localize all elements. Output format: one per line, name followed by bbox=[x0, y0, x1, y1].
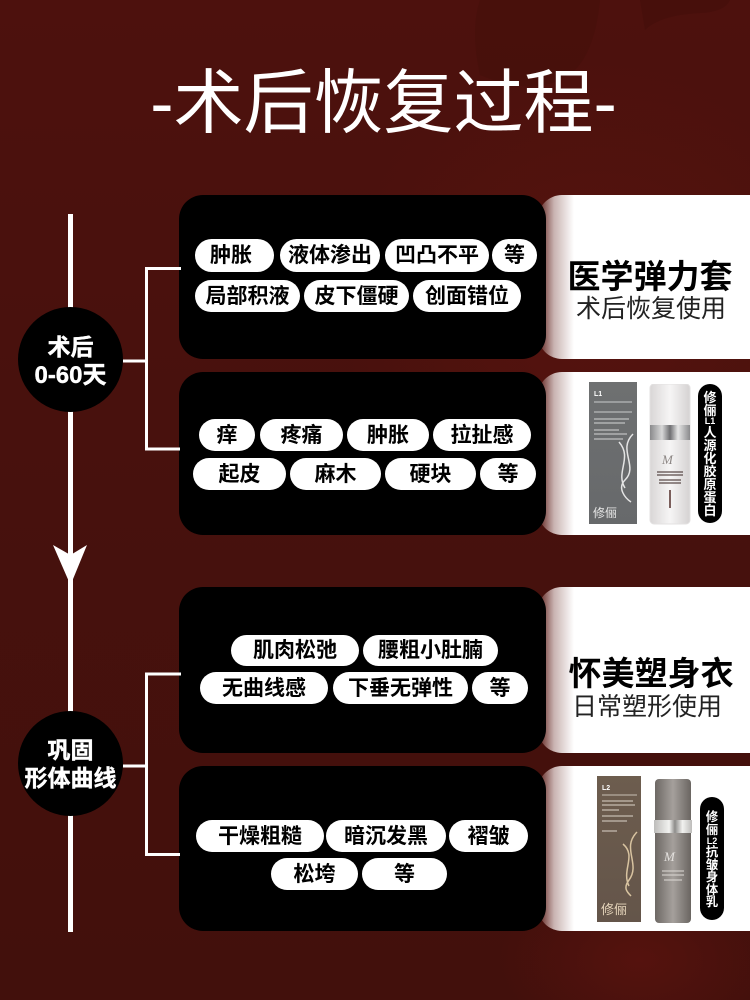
vertical label L1: 原 bbox=[703, 477, 716, 492]
pill: 痒 bbox=[216, 424, 238, 447]
pill: 拉扯感 bbox=[450, 424, 514, 447]
product bottle L1 bbox=[650, 384, 690, 524]
pill bbox=[260, 419, 343, 451]
side panel: compression garment bbox=[538, 195, 750, 359]
text: daily shaping use: 日常塑形使用 bbox=[572, 693, 722, 721]
pill bbox=[199, 419, 255, 451]
circle: consolidate body curve: 形体曲线 bbox=[24, 765, 116, 791]
timeline arrow line bbox=[53, 214, 87, 932]
pill: 液体渗出 bbox=[288, 244, 372, 267]
product bottle L2 bbox=[654, 779, 692, 923]
panel: skin problems bbox=[179, 766, 546, 931]
pill bbox=[231, 635, 359, 666]
side panel: shapewear bbox=[538, 587, 750, 753]
pill: 肿胀 bbox=[210, 244, 252, 267]
vertical label L1 bbox=[698, 384, 722, 523]
pill bbox=[385, 458, 476, 490]
product box L1: L1 bbox=[594, 391, 602, 398]
pill: 肿胀 bbox=[367, 424, 409, 447]
pill: 等 bbox=[490, 677, 510, 700]
pill: 皮下僵硬 bbox=[314, 285, 398, 308]
vertical label L1: 胶 bbox=[703, 464, 716, 479]
circle: post-op 0-60 days: 术后 bbox=[48, 334, 94, 360]
pill: 等 bbox=[504, 244, 525, 267]
vertical label L2: L2 bbox=[707, 836, 717, 846]
connector: post-op bracket bbox=[123, 267, 181, 450]
pill bbox=[449, 820, 528, 852]
pill bbox=[492, 239, 537, 272]
vertical label L1: 蛋 bbox=[703, 490, 716, 505]
vertical label L2: 身 bbox=[706, 870, 718, 884]
pill: 肌肉松弛 bbox=[253, 639, 337, 662]
pill: 下垂无弹性 bbox=[348, 677, 453, 700]
pill bbox=[195, 239, 274, 272]
pill bbox=[195, 280, 300, 312]
heading: shapewear: 怀美塑身衣 bbox=[568, 655, 734, 692]
pill bbox=[472, 672, 528, 704]
product box L2: 修俪 bbox=[601, 899, 627, 918]
pill bbox=[290, 458, 381, 490]
pill bbox=[433, 419, 531, 451]
vertical label L2 bbox=[700, 797, 724, 920]
product bottle L2: M bbox=[663, 849, 676, 864]
pill bbox=[280, 239, 380, 272]
vertical label L2: 修 bbox=[706, 810, 718, 824]
vertical label L2: 体 bbox=[706, 882, 718, 896]
product box L1: 修俪 bbox=[593, 504, 617, 521]
pill: 松垮 bbox=[294, 863, 336, 886]
product box L2: L2 bbox=[602, 785, 610, 792]
pill: 凹凸不平 bbox=[395, 244, 479, 267]
heading: medical compression garment: 医学弹力套 bbox=[568, 258, 732, 295]
vertical label L1: L1 bbox=[705, 416, 715, 426]
pill: 等 bbox=[394, 863, 415, 886]
pill bbox=[200, 672, 328, 704]
pill: 干燥粗糙 bbox=[218, 825, 302, 848]
vertical label L1: 修 bbox=[703, 390, 716, 405]
pill bbox=[385, 239, 489, 272]
pill bbox=[271, 858, 358, 890]
vertical label L2: 俪 bbox=[706, 822, 718, 836]
pill bbox=[304, 280, 409, 312]
vertical label L1: 源 bbox=[703, 438, 716, 453]
panel: post-op symptoms 1 bbox=[179, 195, 546, 359]
vertical label L2: 乳 bbox=[706, 895, 718, 909]
pill bbox=[193, 458, 286, 490]
pill: 暗沉发黑 bbox=[344, 825, 428, 848]
pill bbox=[333, 672, 468, 704]
circle: consolidate body curve bbox=[18, 711, 123, 816]
pill: 起皮 bbox=[218, 463, 260, 486]
vertical label L1: 白 bbox=[703, 503, 716, 518]
pill bbox=[362, 858, 447, 890]
vertical label L2: 皱 bbox=[706, 858, 718, 872]
vertical label L1: 俪 bbox=[703, 403, 716, 418]
title: -术后恢复过程- bbox=[150, 64, 617, 142]
pill: 局部积液 bbox=[206, 285, 290, 308]
pill bbox=[326, 820, 446, 852]
side panel: product L1 bbox=[538, 372, 750, 535]
pill bbox=[347, 419, 429, 451]
pill: 等 bbox=[498, 463, 518, 486]
text: post-op use: 术后恢复使用 bbox=[576, 295, 726, 323]
pill: 无曲线感 bbox=[222, 677, 306, 700]
product box L1 bbox=[589, 382, 637, 524]
side panel: product L2 bbox=[538, 766, 750, 931]
pill: 硬块 bbox=[410, 463, 452, 486]
panel: post-op symptoms 2 bbox=[179, 372, 546, 535]
pill bbox=[196, 820, 324, 852]
pill: 创面错位 bbox=[425, 285, 509, 308]
vertical label L1: 人 bbox=[703, 425, 716, 440]
circle: consolidate body curve: 巩固 bbox=[48, 737, 94, 763]
circle: post-op 0-60 days bbox=[18, 307, 123, 412]
product bottle L1: M bbox=[661, 452, 674, 467]
pill: 褶皱 bbox=[468, 825, 510, 848]
connector: shaping bracket bbox=[123, 672, 181, 856]
pill: 疼痛 bbox=[280, 424, 322, 447]
panel: body shape problems bbox=[179, 587, 546, 753]
pill bbox=[363, 635, 498, 666]
pill bbox=[413, 280, 521, 312]
product box L2 bbox=[597, 776, 641, 922]
pill: 腰粗小肚腩 bbox=[378, 639, 483, 662]
vertical label L1: 化 bbox=[703, 451, 716, 466]
circle: post-op 0-60 days: 0-60天 bbox=[34, 362, 107, 389]
vertical label L2: 抗 bbox=[706, 845, 718, 859]
pill: 麻木 bbox=[314, 463, 356, 486]
pill bbox=[480, 458, 536, 490]
